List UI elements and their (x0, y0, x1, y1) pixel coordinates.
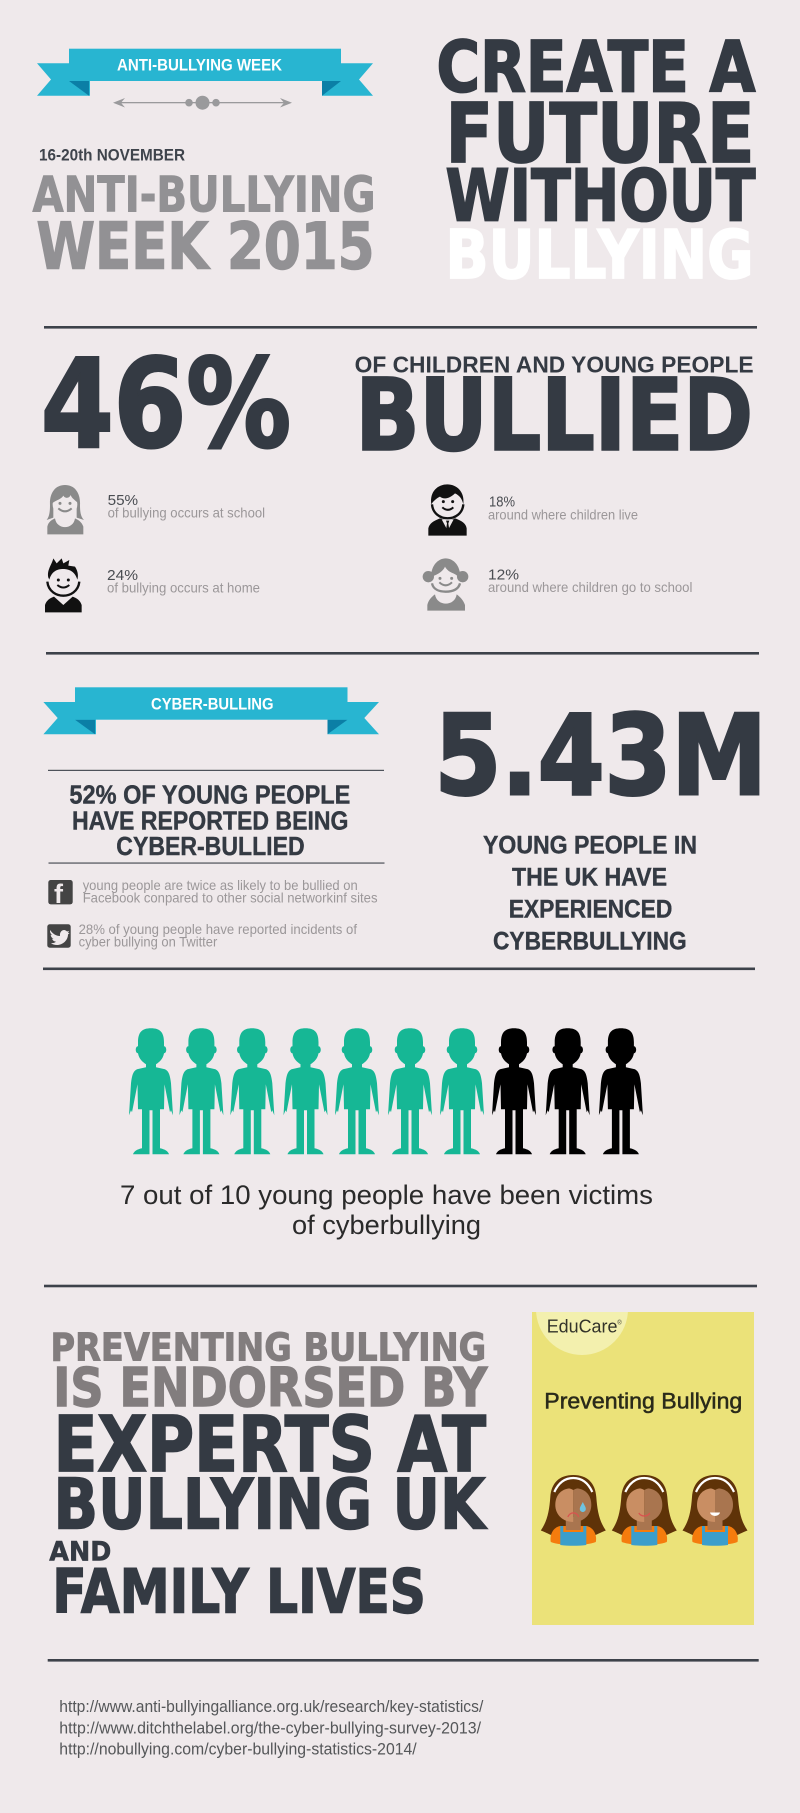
date: 16-20th NOVEMBER (39, 145, 185, 164)
banner: anti-bullying week (37, 49, 373, 96)
stat: 18 percent where children live: 18% (489, 494, 515, 511)
heading: preventing bullying endorsed: BULLYING UK (54, 1465, 487, 1546)
stat: 18 percent where children live (488, 494, 638, 522)
source links: http://www.anti-bullyingalliance.org.uk/research/key-statistics/ (59, 1697, 484, 1716)
heading: anti-bullying week 2015: ANTI-BULLYING (32, 166, 376, 224)
stat: 24 percent at home (107, 567, 260, 596)
icon: boy in suit (428, 484, 467, 536)
book cover: preventing bullying (532, 1312, 754, 1625)
logo: educare: EduCare (547, 1316, 620, 1337)
ornament: arrow divider (113, 96, 292, 110)
heading: preventing bullying endorsed (49, 1326, 488, 1628)
icon: twitter (47, 924, 71, 948)
icon: girl (47, 485, 84, 534)
heading: preventing bullying endorsed: FAMILY LIVES (52, 1558, 426, 1628)
text: young people in the uk: YOUNG PEOPLE IN (483, 832, 697, 859)
text: young people in the uk (483, 832, 697, 955)
stat: 18 percent where children live: around where children live (488, 506, 638, 522)
text: 52 percent cyber-bullied (69, 782, 350, 861)
icon: facebook (48, 879, 73, 909)
heading: preventing bullying endorsed: PREVENTING BULLYING (50, 1326, 486, 1370)
heading: preventing bullying endorsed: EXPERTS AT (54, 1401, 486, 1490)
heading: of children and young people bullied: OF CHILDREN AND YOUNG PEOPLE (355, 351, 754, 377)
text: facebook statistic: young people are twice as likely to be bullied on (83, 877, 358, 893)
illustration: happy girl (682, 1475, 748, 1546)
text: 52 percent cyber-bullied: CYBER-BULLIED (116, 833, 305, 861)
text: young people in the uk: THE UK HAVE (512, 865, 667, 892)
text: facebook statistic (83, 877, 377, 905)
heading: anti-bullying week 2015: WEEK 2015 (36, 211, 374, 285)
title: create a future without bullying: BULLYING (446, 216, 754, 294)
text: facebook statistic: Facebook conpared to other social networkinf sites (83, 889, 377, 905)
stat: 12 percent where children go to school: around where children go to school (488, 579, 692, 595)
text: 52 percent cyber-bullied: 52% OF YOUNG PEOPLE (69, 782, 350, 810)
illustration: sad girl (541, 1475, 606, 1546)
heading: anti-bullying week 2015 (32, 166, 376, 285)
banner: anti-bullying week: ANTI-BULLYING WEEK (117, 55, 282, 74)
source links: http://www.ditchthelabel.org/the-cyber-bullying-survey-2013/ (59, 1718, 481, 1737)
heading: preventing bullying endorsed: IS ENDORSED BY (53, 1356, 488, 1419)
icon: woman with hair buns (423, 558, 468, 611)
source links (59, 1697, 484, 1758)
heading: preventing bullying endorsed: AND (49, 1536, 111, 1567)
stat: 12 percent where children go to school (488, 566, 692, 595)
text: twitter statistic: 28% of young people have reported incidents of (79, 921, 357, 937)
icon: boy with spiky hair (45, 558, 82, 612)
banner: cyber-bulling (43, 687, 379, 734)
caption: 7 out of 10: 7 out of 10 young people have been victims (120, 1180, 653, 1210)
stat: 24 percent at home: 24% (107, 567, 138, 584)
stat: 24 percent at home: of bullying occurs at home (107, 580, 260, 596)
stat: 55 percent at school: of bullying occurs at school (108, 505, 265, 521)
pictogram: 7 of 10 people (129, 1028, 643, 1154)
banner: cyber-bulling: CYBER-BULLING (151, 695, 274, 714)
text: twitter statistic (79, 921, 357, 950)
statistic: 46 percent: 46% (41, 334, 291, 476)
caption: 7 out of 10 (120, 1180, 653, 1240)
title: create a future without bullying: FUTURE (446, 87, 754, 182)
caption: 7 out of 10: of cyberbullying (292, 1210, 481, 1240)
icon: facebook: f (54, 879, 64, 909)
logo: educare: ® (617, 1320, 622, 1327)
book title: Preventing Bullying (544, 1388, 742, 1413)
text: young people in the uk: EXPERIENCED (509, 897, 672, 924)
text: 52 percent cyber-bullied: HAVE REPORTED BEING (72, 808, 348, 836)
illustration: calm girl (612, 1475, 677, 1546)
source links: http://nobullying.com/cyber-bullying-statistics-2014/ (59, 1739, 417, 1758)
stat: 55 percent at school: 55% (108, 492, 138, 509)
title: create a future without bullying (436, 26, 756, 294)
stat: 12 percent where children go to school: 12% (488, 566, 519, 583)
stat: 55 percent at school (108, 492, 265, 521)
text: young people in the uk: CYBERBULLYING (493, 928, 687, 955)
text: twitter statistic: cyber bullying on Twitter (79, 934, 218, 950)
